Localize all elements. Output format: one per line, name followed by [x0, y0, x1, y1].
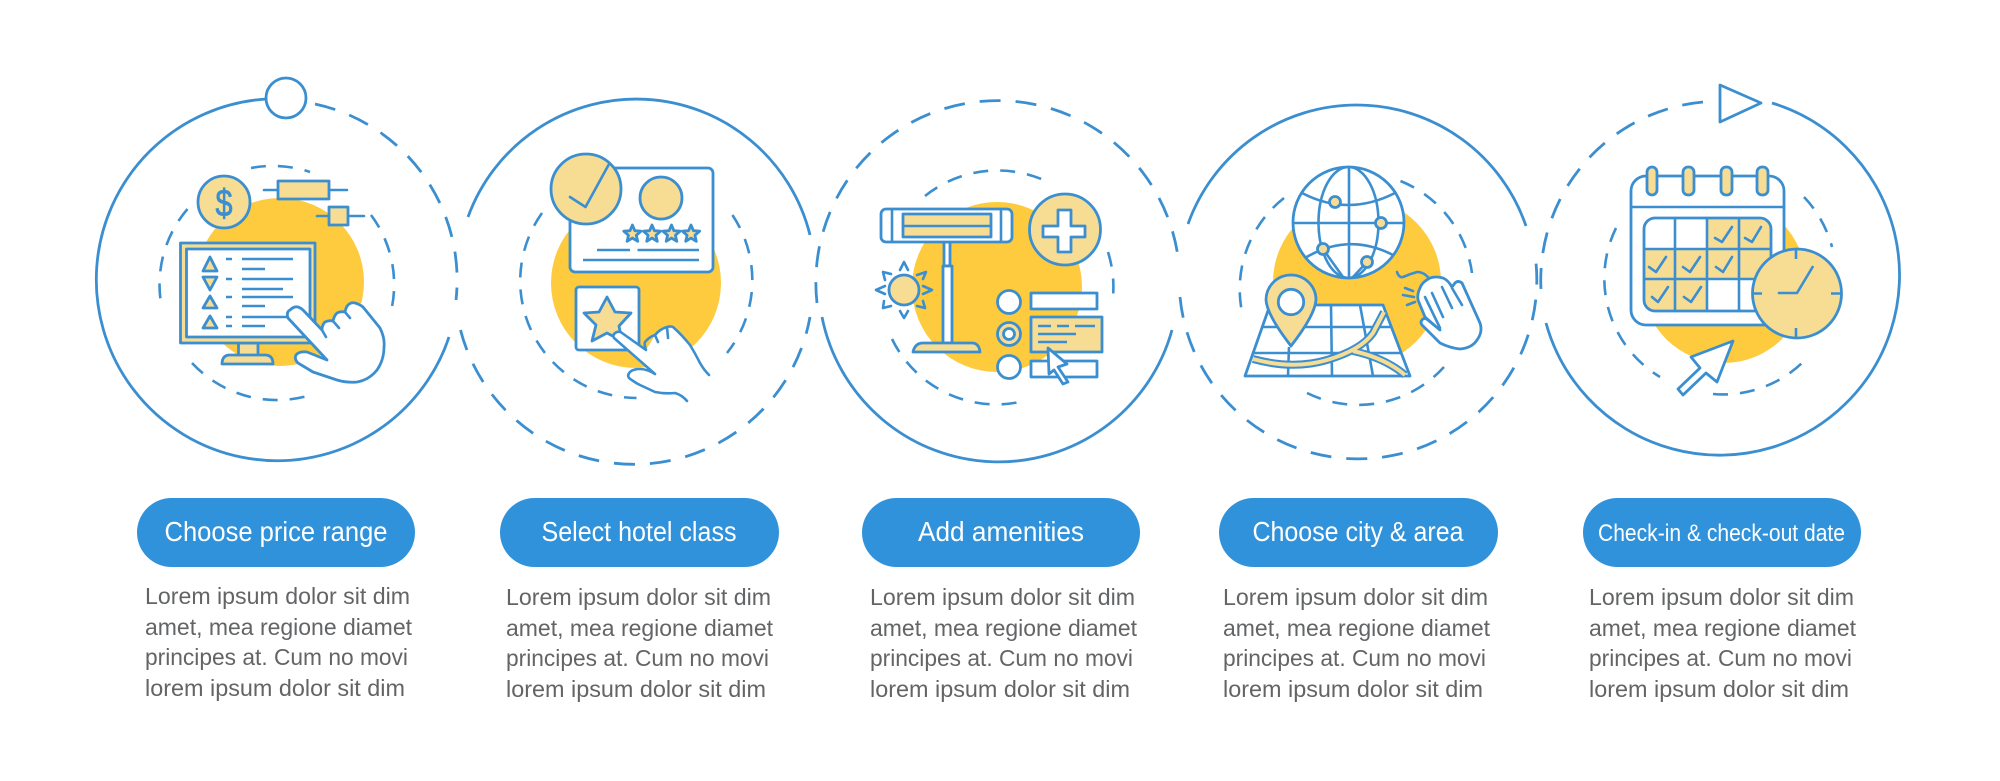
text block: step 3 description — [870, 584, 1138, 702]
text block: step 5 description: principes at. Cum no movi — [1589, 645, 1852, 671]
icon: pointing hand — [613, 326, 709, 401]
pill heading: Choose city & area: Choose city & area — [1252, 516, 1464, 547]
ring: step 3 — [816, 101, 1179, 462]
pill heading: Check-in & check-out date — [1583, 498, 1861, 567]
icon: calendar, clock and cursor — [1631, 167, 1842, 395]
text block: step 3 description: Lorem ipsum dolor sit dim — [870, 584, 1135, 610]
text block: step 2 description: principes at. Cum no movi — [506, 645, 769, 671]
pill heading: Choose price range: Choose price range — [164, 516, 388, 547]
ring: step 4 — [1180, 105, 1537, 459]
ring: step 2 — [460, 99, 810, 464]
text block: step 3 description: amet, mea regione diamet — [870, 615, 1138, 641]
ring: step 1 — [96, 78, 457, 461]
text block: step 3 description: principes at. Cum no movi — [870, 645, 1133, 671]
text block: step 3 description: lorem ipsum dolor sit dim — [870, 676, 1130, 702]
text block: step 4 description — [1223, 584, 1491, 702]
panel: step 3 add amenities — [816, 101, 1179, 702]
pill heading: Check-in & check-out date: Check-in & check-out date — [1598, 520, 1845, 547]
text block: step 5 description: Lorem ipsum dolor sit dim — [1589, 584, 1854, 610]
pill heading: Add amenities: Add amenities — [918, 516, 1084, 547]
icon: pointing hand — [287, 303, 384, 382]
icon: price range monitor and hand: $ — [216, 183, 232, 225]
text block: step 5 description: lorem ipsum dolor sit dim — [1589, 676, 1849, 702]
panel: step 5 check-in and check-out date — [1541, 85, 1900, 702]
text block: step 4 description: amet, mea regione diamet — [1223, 615, 1491, 641]
text block: step 4 description: principes at. Cum no movi — [1223, 645, 1486, 671]
text block: step 1 description: Lorem ipsum dolor sit dim — [145, 583, 410, 609]
pill heading: Choose city & area — [1219, 498, 1498, 567]
icon: hand on mouse — [1418, 277, 1481, 349]
text block: step 4 description: lorem ipsum dolor sit dim — [1223, 676, 1483, 702]
text block: step 2 description: Lorem ipsum dolor sit dim — [506, 584, 771, 610]
panel: step 4 choose city and area — [1180, 105, 1537, 702]
ring: step 5 — [1541, 85, 1900, 455]
icon: heater, plus badge and options — [876, 194, 1102, 384]
pill heading: Select hotel class — [500, 498, 779, 567]
pill heading: Choose price range — [137, 498, 415, 567]
icon: hotel rating card and hand — [551, 154, 721, 401]
text block: step 1 description: principes at. Cum no movi — [145, 644, 408, 670]
pill heading: Add amenities — [862, 498, 1140, 567]
panel: step 2 select hotel class — [460, 99, 810, 702]
text block: step 4 description: Lorem ipsum dolor sit dim — [1223, 584, 1488, 610]
text block: step 1 description — [145, 583, 413, 701]
text block: step 1 description: lorem ipsum dolor sit dim — [145, 675, 405, 701]
text block: step 5 description — [1589, 584, 1857, 702]
text block: step 2 description: amet, mea regione diamet — [506, 615, 774, 641]
text block: step 1 description: amet, mea regione diamet — [145, 614, 413, 640]
panel: step 1 choose price range — [96, 78, 457, 701]
pill heading: Select hotel class: Select hotel class — [542, 516, 736, 547]
text block: step 2 description — [506, 584, 774, 702]
icon: globe, map pin and mouse hand — [1245, 167, 1481, 376]
icon: price range monitor and hand — [180, 176, 384, 382]
text block: step 2 description: lorem ipsum dolor sit dim — [506, 676, 766, 702]
text block: step 5 description: amet, mea regione diamet — [1589, 615, 1857, 641]
